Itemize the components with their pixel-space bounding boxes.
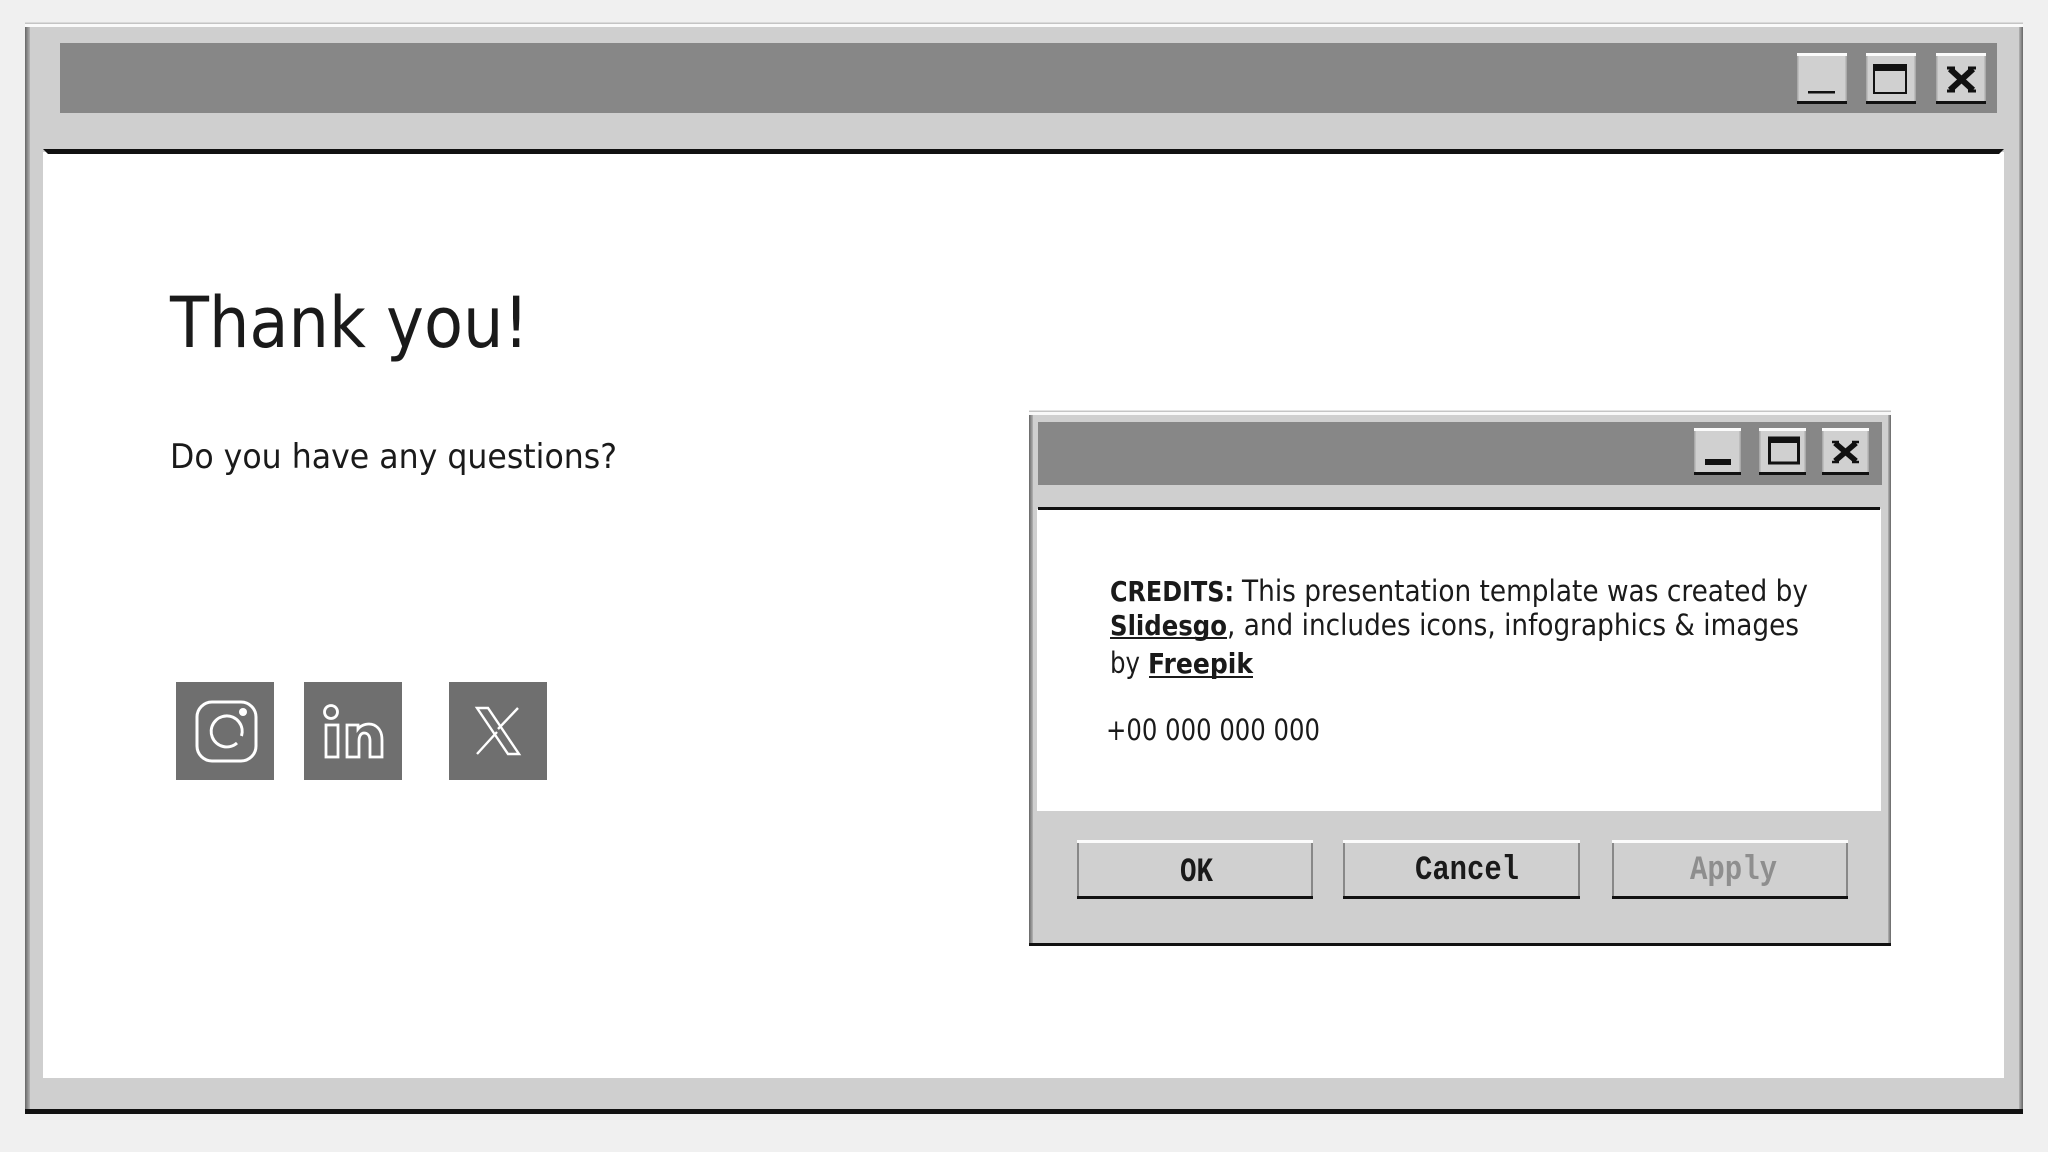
dialog close button — [1822, 428, 1869, 475]
minimize button — [1797, 53, 1847, 104]
OK button — [1077, 840, 1313, 899]
dialog content area — [1037, 509, 1881, 811]
maximize button — [1866, 53, 1916, 104]
title: Thank you! — [169, 282, 529, 364]
dialog maximize button — [1759, 428, 1806, 475]
Apply button: Apply — [1690, 852, 1777, 890]
icon: X — [449, 682, 547, 780]
credits text: , and includes icons, infographics & images — [1227, 608, 1799, 642]
main title bar — [60, 43, 1997, 113]
Cancel button — [1343, 840, 1580, 899]
phone number: +00 000 000 000 — [1106, 713, 1320, 747]
dialog title bar — [1038, 422, 1882, 485]
icon: instagram — [176, 682, 274, 780]
subtitle: Do you have any questions? — [170, 437, 617, 477]
dialog window — [1029, 410, 1891, 946]
main content area — [43, 152, 2004, 1078]
social icons — [176, 682, 547, 780]
OK button: OK — [1180, 854, 1213, 892]
icon: linkedin — [304, 682, 402, 780]
dialog content top edge — [1038, 507, 1880, 510]
credits text: Freepik — [1148, 647, 1254, 680]
credits text: CREDITS: — [1110, 575, 1234, 608]
close button — [1936, 53, 1986, 104]
credits text: Slidesgo — [1110, 609, 1227, 642]
credits text — [1110, 574, 1808, 680]
Cancel button: Cancel — [1415, 852, 1519, 890]
credits text: by — [1110, 646, 1140, 680]
main content top edge — [43, 149, 2004, 154]
credits text: This presentation template was created by — [1241, 574, 1808, 608]
dialog minimize button — [1694, 428, 1741, 475]
Apply button — [1612, 840, 1848, 899]
